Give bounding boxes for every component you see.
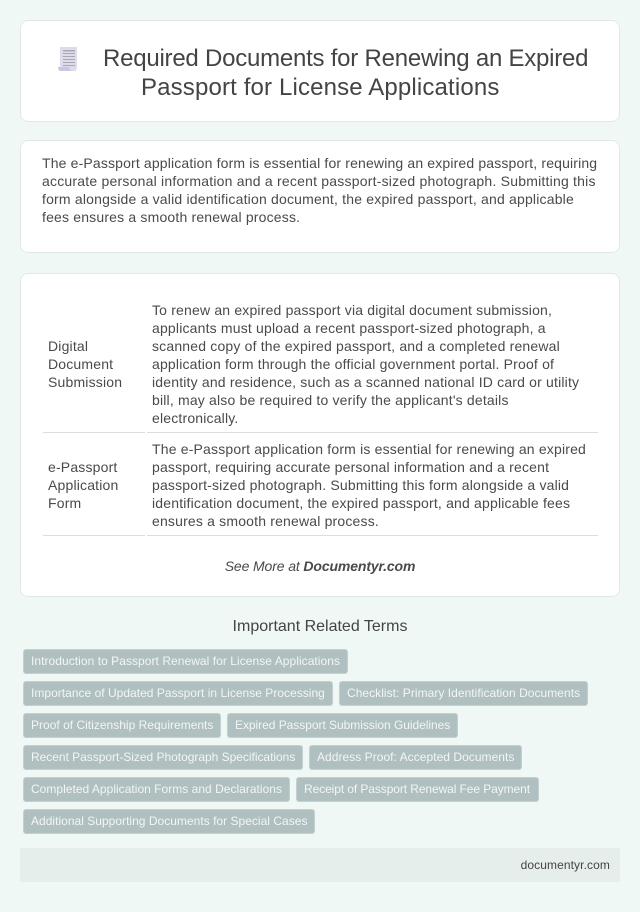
- panel: document table: [20, 273, 620, 597]
- row description: scanned copy of the expired passport, and a completed renewal: [152, 338, 560, 354]
- row description: [152, 441, 586, 529]
- tag: Importance of Updated Passport in License Processing: [31, 686, 325, 700]
- title: Required Documents for Renewing an Expired: [103, 45, 588, 72]
- intro text: [42, 155, 597, 225]
- title: Passport for License Applications: [141, 74, 499, 101]
- tag: Completed Application Forms and Declarations: [31, 782, 282, 796]
- row label: [48, 338, 122, 390]
- row: digital document submission: [43, 302, 598, 433]
- row description: identification document, the expired passport, and applicable fees: [152, 495, 570, 511]
- row description: To renew an expired passport via digital document submission,: [152, 302, 552, 318]
- row label: Application: [48, 477, 118, 493]
- tag: Recent Passport-Sized Photograph Specifications: [31, 750, 295, 764]
- intro text: fees ensures a smooth renewal process.: [42, 209, 300, 225]
- row: e-passport application form: [43, 441, 598, 536]
- tag list: [23, 649, 588, 834]
- tag: Introduction to Passport Renewal for License Applications: [31, 654, 340, 668]
- tag: Checklist: Primary Identification Documents: [347, 686, 580, 700]
- tag: [23, 809, 315, 834]
- tag: [23, 713, 221, 738]
- tag: Expired Passport Submission Guidelines: [235, 718, 450, 732]
- row label: Form: [48, 495, 81, 511]
- tag: [227, 713, 458, 738]
- intro text: form alongside a valid identification document, the expired passport, and applicable: [42, 191, 574, 207]
- see more link: See More at Documentyr.com: [225, 558, 415, 574]
- row label: Submission: [48, 374, 122, 390]
- row description: applicants must upload a recent passport-sized photograph, a: [152, 320, 546, 336]
- row description: application form through the official government portal. Proof of: [152, 356, 554, 372]
- tag: Proof of Citizenship Requirements: [31, 718, 213, 732]
- tag: [23, 777, 290, 802]
- tag: [339, 681, 588, 706]
- row label: [48, 459, 118, 511]
- row description: passport-sized photograph. Submitting this form alongside a valid: [152, 477, 569, 493]
- row description: [152, 302, 579, 426]
- row description: electronically.: [152, 410, 238, 426]
- row label: Document: [48, 356, 113, 372]
- row description: bill, may also be required to verify the applicant's details: [152, 392, 509, 408]
- icon: document: [58, 47, 77, 71]
- tag: Receipt of Passport Renewal Fee Payment: [304, 782, 530, 796]
- tag: [309, 745, 522, 770]
- row description: The e-Passport application form is essential for renewing an expired: [152, 441, 586, 457]
- title: [103, 45, 588, 101]
- tag: [23, 681, 333, 706]
- footer bar: [20, 848, 620, 882]
- row description: ensures a smooth renewal process.: [152, 513, 379, 529]
- tag: [296, 777, 539, 802]
- row description: passport, requiring accurate personal information and a recent: [152, 459, 549, 475]
- row label: e-Passport: [48, 459, 118, 475]
- intro text: accurate personal information and a recent passport-sized photograph. Submitting this: [42, 173, 596, 189]
- tag: [23, 745, 303, 770]
- heading: important related terms: Important Related Terms: [233, 618, 407, 635]
- row description: identity and residence, such as a scanned national ID card or utility: [152, 374, 579, 390]
- tag: Additional Supporting Documents for Special Cases: [31, 814, 307, 828]
- tag: Address Proof: Accepted Documents: [317, 750, 514, 764]
- panel: title card: [20, 20, 620, 122]
- intro text: The e-Passport application form is essential for renewing an expired passport, requiring: [42, 155, 597, 171]
- footer text: documentyr.com: [521, 858, 610, 872]
- row label: Digital: [48, 338, 88, 354]
- tag: [23, 649, 348, 674]
- panel: intro paragraph: [20, 140, 620, 253]
